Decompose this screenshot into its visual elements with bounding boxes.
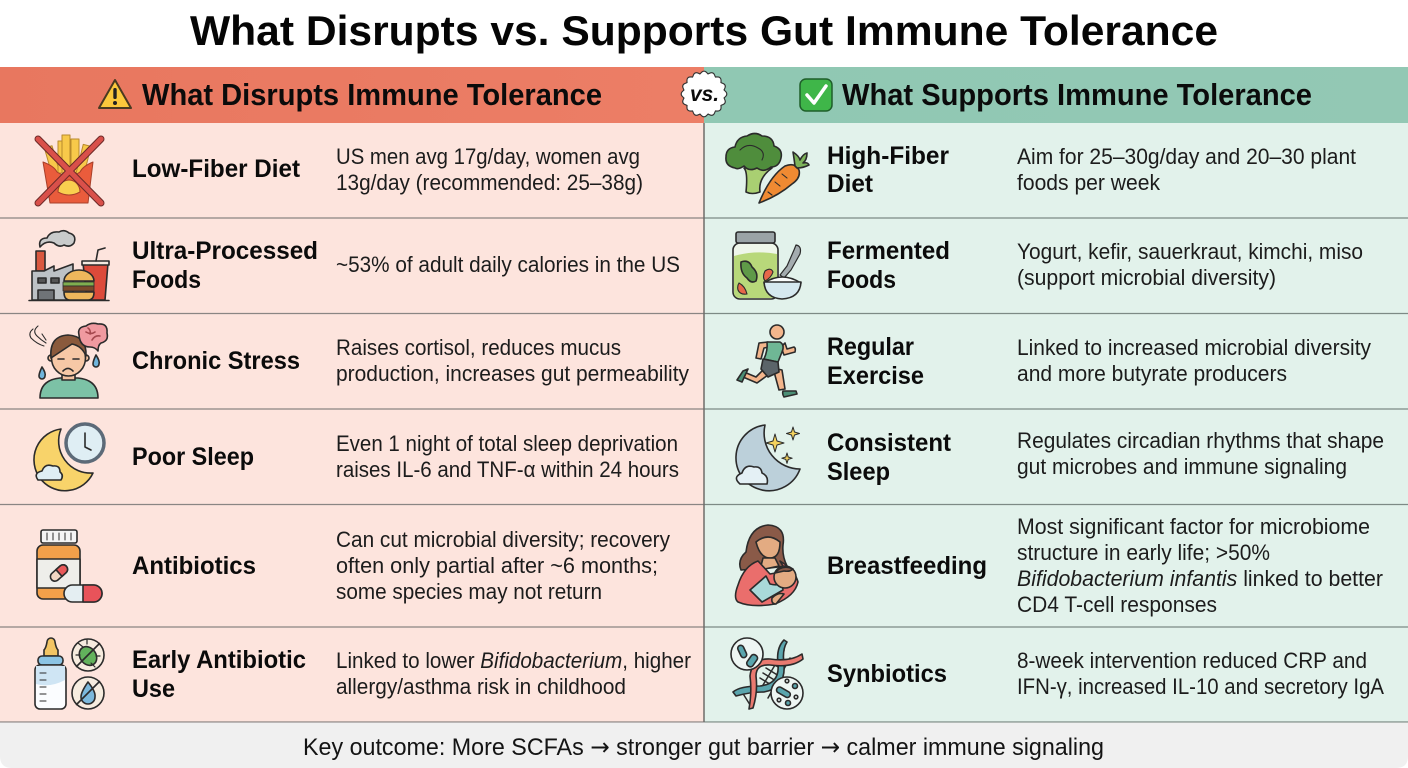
description: Most significant factor for microbiome [1017, 514, 1370, 539]
description: and more butyrate producers [1017, 361, 1287, 386]
description: structure in early life; >50% [1017, 540, 1270, 565]
row: high-fiber diet [726, 134, 1356, 203]
icon: broccoli and carrot [726, 134, 809, 203]
label: Foods [827, 266, 896, 294]
description: Regulates circadian rhythms that shape [1017, 428, 1384, 453]
row: breastfeeding [736, 514, 1383, 617]
label [132, 646, 306, 703]
label [132, 237, 318, 294]
vs badge [680, 70, 728, 118]
row: chronic stress [30, 323, 689, 398]
label: Diet [827, 170, 874, 198]
panel: what supports background [704, 123, 1408, 722]
row: early antibiotic use [35, 638, 691, 709]
description [1017, 144, 1356, 195]
description [1017, 648, 1384, 699]
panel: what disrupts background [0, 123, 704, 722]
row: poor sleep [34, 424, 679, 491]
row: antibiotics [37, 527, 670, 604]
description [1017, 428, 1384, 479]
description: IFN-γ, increased IL-10 and secretory IgA [1017, 674, 1384, 699]
icon: runner [737, 325, 797, 397]
header: what supports [704, 67, 1408, 123]
description [336, 431, 679, 482]
label [827, 237, 950, 294]
header: what supports: What Supports Immune Tolerance [842, 77, 1312, 112]
description [336, 144, 643, 195]
label: Low-Fiber Diet [132, 155, 301, 183]
description: ~53% of adult daily calories in the US [336, 252, 680, 277]
description: allergy/asthma risk in childhood [336, 674, 626, 699]
description [336, 527, 670, 604]
description: Linked to lower Bifidobacterium, higher [336, 648, 691, 673]
description: gut microbes and immune signaling [1017, 454, 1347, 479]
label: Ultra-Processed [132, 237, 318, 265]
label: Breastfeeding [827, 552, 987, 580]
icon: mother nursing baby [736, 525, 798, 606]
header: what disrupts [0, 67, 704, 123]
label: Antibiotics [132, 552, 256, 580]
row: regular exercise [737, 325, 1371, 397]
description: foods per week [1017, 170, 1161, 195]
label [827, 142, 949, 198]
icon: DNA helix with microbes [731, 638, 803, 709]
description [1017, 514, 1383, 617]
label: Use [132, 675, 175, 703]
label: Fermented [827, 237, 950, 265]
description: Can cut microbial diversity; recovery [336, 527, 670, 552]
description: 13g/day (recommended: 25–38g) [336, 170, 643, 195]
row: consistent sleep [736, 425, 1384, 491]
row: synbiotics [731, 638, 1384, 709]
description: often only partial after ~6 months; [336, 553, 658, 578]
description [336, 648, 691, 699]
description: Linked to increased microbial diversity [1017, 335, 1371, 360]
description: production, increases gut permeability [336, 361, 689, 386]
row: fermented foods [733, 232, 1363, 299]
icon: factory, burger and soda [29, 231, 109, 300]
description: 8-week intervention reduced CRP and [1017, 648, 1367, 673]
label [827, 333, 924, 390]
footer: key outcome: Key outcome: More SCFAs → stronger gut barrier → calmer immune signaling [303, 733, 1104, 761]
description [1017, 239, 1363, 290]
description: (support microbial diversity) [1017, 265, 1276, 290]
label: Synbiotics [827, 660, 947, 688]
description: Raises cortisol, reduces mucus [336, 335, 621, 360]
description: raises IL-6 and TNF-α within 24 hours [336, 457, 679, 482]
icon: moon and stars [736, 425, 800, 491]
icon: baby bottle with crossed microbes [35, 638, 104, 709]
title: What Disrupts vs. Supports Gut Immune Tolerance [190, 7, 1218, 54]
description: Aim for 25–30g/day and 20–30 plant [1017, 144, 1356, 169]
row: ultra-processed foods [29, 231, 680, 300]
description: Yogurt, kefir, sauerkraut, kimchi, miso [1017, 239, 1363, 264]
label: Exercise [827, 362, 924, 390]
icon: pill bottle and capsule [37, 530, 102, 602]
description: Even 1 night of total sleep deprivation [336, 431, 678, 456]
row: low-fiber diet [38, 135, 643, 203]
description [336, 335, 689, 386]
label: Early Antibiotic [132, 646, 306, 674]
icon: warning triangle [99, 80, 131, 108]
description: CD4 T-cell responses [1017, 592, 1217, 617]
label [827, 429, 952, 486]
footer: key outcome [0, 723, 1408, 768]
label: High-Fiber [827, 142, 949, 170]
label: Foods [132, 266, 201, 294]
description: Bifidobacterium infantis linked to better [1017, 566, 1383, 591]
icon: crossed-out fries [38, 135, 101, 203]
description [1017, 335, 1371, 386]
label: Sleep [827, 458, 890, 486]
label: Chronic Stress [132, 347, 300, 375]
icon: green check [800, 79, 832, 111]
icon: fermented jar with yogurt bowl [733, 232, 801, 299]
label: Poor Sleep [132, 443, 254, 471]
label: Regular [827, 333, 914, 361]
description: US men avg 17g/day, women avg [336, 144, 640, 169]
header: what disrupts: What Disrupts Immune Tolerance [142, 77, 602, 112]
vs badge: vs. [690, 83, 719, 106]
icon: moon and clock [34, 424, 104, 491]
description: some species may not return [336, 579, 602, 604]
label: Consistent [827, 429, 952, 457]
icon: stressed person with brain [30, 323, 107, 398]
